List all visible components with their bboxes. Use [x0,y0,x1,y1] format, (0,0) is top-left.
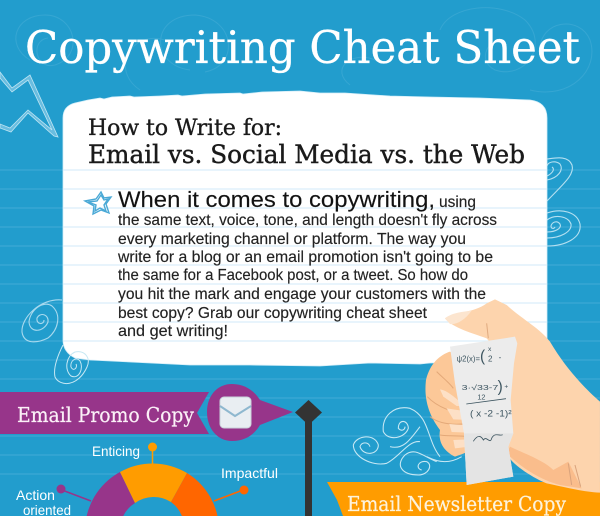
callout: action oriented [16,484,91,516]
banner: email newsletter copy [327,482,600,516]
title: Copywriting Cheat Sheet [25,21,580,74]
swirl: right of card top [547,158,572,201]
heading: email vs social vs web: Email vs. Social Media vs. the Web [88,140,525,170]
label: email newsletter copy: Email Newsletter Copy [347,492,566,516]
text block: intro paragraph: When it comes to copywriting, [118,187,435,212]
text block: intro paragraph: best copy? Grab our copywriting cheat sheet [118,305,428,322]
swirl: right of card lower [547,211,580,246]
text block: intro paragraph: using [439,194,476,211]
swirl: below card left [55,345,88,384]
fingers [425,352,473,457]
text block: intro paragraph [117,187,497,340]
note paper: ) [498,379,503,396]
note paper: ( x -2 -1)² [470,409,512,419]
note paper: 3·√33-7 [462,383,498,392]
icon: star doodle [85,192,111,214]
note paper: ( [480,348,486,365]
swirl: by the hand [353,408,462,475]
callout: action oriented: Action [16,487,55,503]
note paper: - [499,353,502,362]
callout: enticing [92,442,157,465]
text block: intro paragraph: and get writing! [118,323,228,340]
stem: timeline [305,415,312,516]
icon: lightning bolt doodle [0,72,58,137]
chart: donut [16,442,278,516]
label: email promo copy: Email Promo Copy [17,403,194,427]
text block: intro paragraph: the same for a Facebook post, or a tweet. So how do [118,267,468,284]
swirl: left of card [22,300,62,342]
note paper: 2 [488,355,493,364]
text block: intro paragraph: every marketing channel or platform. The way you [118,231,466,248]
banner: email promo copy [0,384,293,441]
note paper: x [488,346,492,353]
text block: intro paragraph: you hit the mark and engage your customers with the [118,286,486,303]
note paper: ψ2(x)= [457,355,480,364]
icon: timeline diamond [295,400,322,425]
callout: enticing: Enticing [92,443,140,459]
illustration: hand holding note [425,299,600,493]
hand palm and arm [445,299,600,493]
text block: intro paragraph: write for a blog or an email promotion isn't going to be [117,249,493,266]
heading: how to write for: How to Write for: [88,116,282,141]
note paper [450,337,517,485]
note paper: + [504,383,508,390]
callout: impactful [214,465,278,501]
note paper: 12 [477,392,485,401]
callout: impactful: Impactful [221,465,278,481]
text block: intro paragraph: the same text, voice, tone, and length doesn't fly across [118,212,497,229]
panel: torn paper card [63,91,547,366]
icon: envelope [220,397,251,428]
